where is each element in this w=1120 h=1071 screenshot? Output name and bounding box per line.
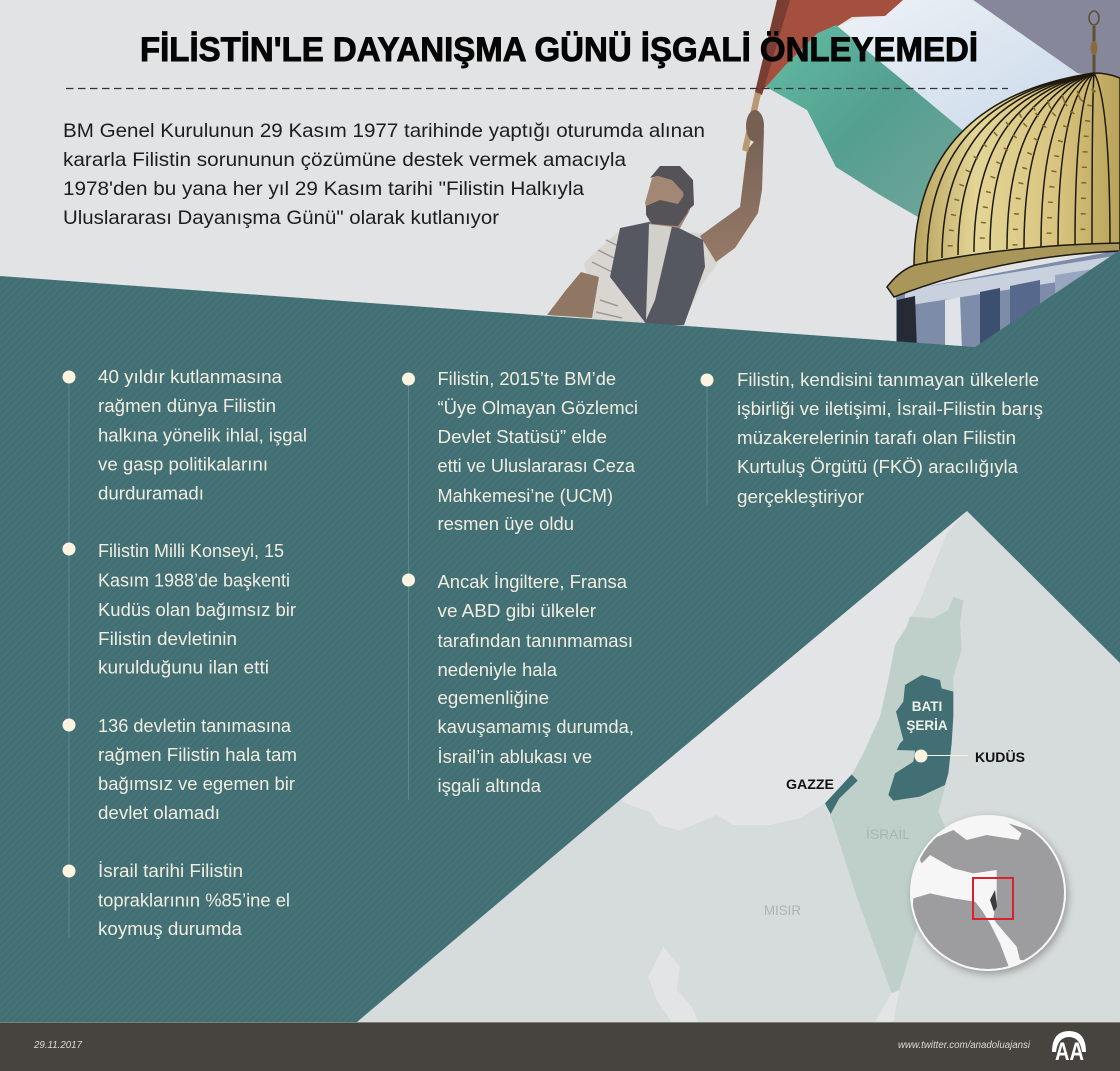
map: Israel (825, 597, 963, 993)
inset: Asia land (920, 824, 1064, 960)
map marker: Kudüs (914, 749, 1025, 765)
bullet: 136 devlet: rağmen Filistin hala tam (98, 744, 297, 765)
bullet: 40 yıldır (62, 366, 307, 504)
bullet: 136 devlet: devlet olamadı (98, 802, 220, 823)
bullet: 136 devlet (62, 715, 297, 823)
illustration: Dome of the Rock (887, 11, 1120, 350)
bullet: 2015 BM: etti ve Uluslararası Ceza (438, 455, 636, 476)
icon: Anadolu Agency logo: AA (1055, 1038, 1084, 1066)
illustration: Palestinian flag (755, 0, 1120, 217)
lowered arm (547, 272, 599, 318)
bullet: 40 yıldır: rağmen dünya Filistin (98, 395, 276, 416)
bullet: Filistin Milli Konseyi: Filistin devletinin (98, 628, 237, 649)
bullet: Ancak İngiltere: kavuşamamış durumda, (438, 716, 634, 737)
bullet: 40 yıldır: halkına yönelik ihlal, işgal (98, 424, 307, 446)
map: Gaza (825, 774, 858, 814)
icon: Anadolu Agency logo (1052, 1031, 1086, 1066)
illustration: man holding the flag (547, 92, 764, 327)
bullet: İsrail tarihi (62, 860, 290, 939)
intro text: Uluslararası Dayanışma Günü" olarak kutlanıyor (63, 207, 500, 229)
footer (0, 1022, 1120, 1071)
intro text: BM Genel Kurulunun 29 Kasım 1977 tarihinde yaptığı oturumda alınan (63, 120, 705, 142)
dome drum (896, 250, 1120, 350)
bullet: Ancak İngiltere: nedeniyle hala (438, 659, 558, 680)
title: FİLİSTİN'LE DAYANIŞMA GÜNÜ İŞGALİ ÖNLEYEMEDİ (140, 31, 978, 69)
bullet: 2015 BM: Filistin, 2015’te BM’de (438, 368, 616, 389)
flag pole (742, 92, 761, 152)
bullet: Ancak İngiltere: İsrail’in ablukası ve (438, 746, 592, 767)
intro text: kararla Filistin sorununun çözümüne destek vermek amacıyla (63, 149, 626, 171)
map marker: Kudüs: KUDÜS (975, 749, 1025, 765)
bullet: 136 devlet: 136 devletin tanımasına (98, 715, 292, 736)
map label: Batı Şeria (906, 699, 948, 733)
crescent finial (1089, 11, 1099, 72)
hair (650, 166, 694, 212)
map: West Bank (888, 675, 953, 801)
bullet: Filistin Milli Konseyi (62, 540, 296, 678)
cupola rim (887, 243, 1120, 297)
bullet: Filistin Milli Konseyi: Kasım 1988’de başkenti (98, 570, 290, 590)
map land (357, 511, 1120, 1022)
panel: teal background (0, 250, 1120, 1023)
locator inset map (910, 817, 1073, 977)
shirt (577, 230, 718, 327)
bullet: 40 yıldır: durduramadı (98, 482, 204, 504)
shirt stripes (592, 240, 622, 318)
cupola tiles (950, 90, 1094, 256)
panel: right column bullet: işbirliği ve iletişimi, İsrail-Filistin barış (737, 398, 1043, 419)
map: Gulf of Suez (648, 947, 698, 1022)
bullet: İsrail tarihi: topraklarının %85’ine el (98, 890, 290, 910)
panel: right column bullet: Filistin, kendisini tanımayan ülkelerle (737, 369, 1039, 390)
inset: Africa land (913, 893, 1008, 969)
bullet: 2015 BM: Mahkemesi’ne (UCM) (438, 485, 613, 506)
bullet: Filistin Milli Konseyi: Filistin Milli Konseyi, 15 (98, 540, 284, 561)
bullet: Ancak İngiltere: egemenliğine (438, 687, 549, 708)
bullet: İsrail tarihi: İsrail tarihi Filistin (98, 860, 243, 881)
panel: right column bullet (700, 369, 1043, 507)
map label: Mısır: MISIR (764, 902, 801, 918)
bullet: 136 devlet: bağımsız ve egemen bir (98, 773, 295, 794)
map (357, 511, 1120, 1022)
bullet: Ancak İngiltere: Ancak İngiltere, Fransa (438, 571, 628, 592)
bullet: Ancak İngiltere: işgali altında (438, 775, 542, 796)
footer date: 29.11.2017 (33, 1040, 82, 1051)
bullet: 40 yıldır: 40 yıldır kutlanmasına (98, 366, 283, 387)
hand (746, 110, 764, 142)
panel: left column bullets (62, 366, 307, 939)
map label: Batı Şeria: BATI (912, 699, 942, 714)
bullet: 40 yıldır: ve gasp politikalarını (98, 454, 268, 474)
map sea (620, 511, 967, 831)
inset: red locator box (973, 878, 1013, 919)
bullet: 2015 BM (402, 368, 638, 534)
bullet: Filistin Milli Konseyi: Kudüs olan bağımsız bir (98, 599, 296, 620)
intro text (63, 120, 705, 229)
bullet: 2015 BM: “Üye Olmayan Gözlemci (438, 397, 638, 418)
face (645, 172, 690, 228)
beard (646, 195, 688, 226)
bullet: 2015 BM: Devlet Statüsü” elde (438, 426, 607, 447)
panel: right column bullet: Kurtuluş Örgütü (FKÖ) aracılığıyla (737, 456, 1019, 477)
footer url: www.twitter.com/anadoluajansi (898, 1040, 1031, 1051)
bullet: Ancak İngiltere: tarafından tanınmaması (438, 630, 633, 651)
bullet: Ancak İngiltere: ve ABD gibi ülkeler (438, 600, 596, 621)
map label: İsrail: İSRAİL (866, 825, 910, 842)
inset: Israel (990, 890, 997, 912)
panel: middle column bullets (402, 368, 638, 800)
cupola ribs (927, 73, 1110, 262)
bullet: İsrail tarihi: koymuş durumda (98, 918, 243, 939)
panel: right column bullet: gerçekleştiriyor (737, 486, 864, 507)
raised arm (700, 130, 764, 262)
intro text: 1978'den bu yana her yıl 29 Kasım tarihi "Filistin Halkıyla (63, 178, 584, 200)
map label: Batı Şeria: ŞERİA (906, 718, 948, 733)
golden cupola (914, 73, 1120, 267)
panel: right column bullet: müzakerelerinin tarafı olan Filistin (737, 427, 1016, 448)
bullet: 2015 BM: resmen üye oldu (438, 513, 574, 534)
bullet: Filistin Milli Konseyi: kurulduğunu ilan etti (98, 656, 269, 678)
map: Gulf of Aqaba (875, 990, 899, 1022)
vest (610, 222, 705, 325)
map label: Gazze: GAZZE (786, 776, 834, 792)
bullet: Ancak İngiltere (402, 571, 634, 796)
